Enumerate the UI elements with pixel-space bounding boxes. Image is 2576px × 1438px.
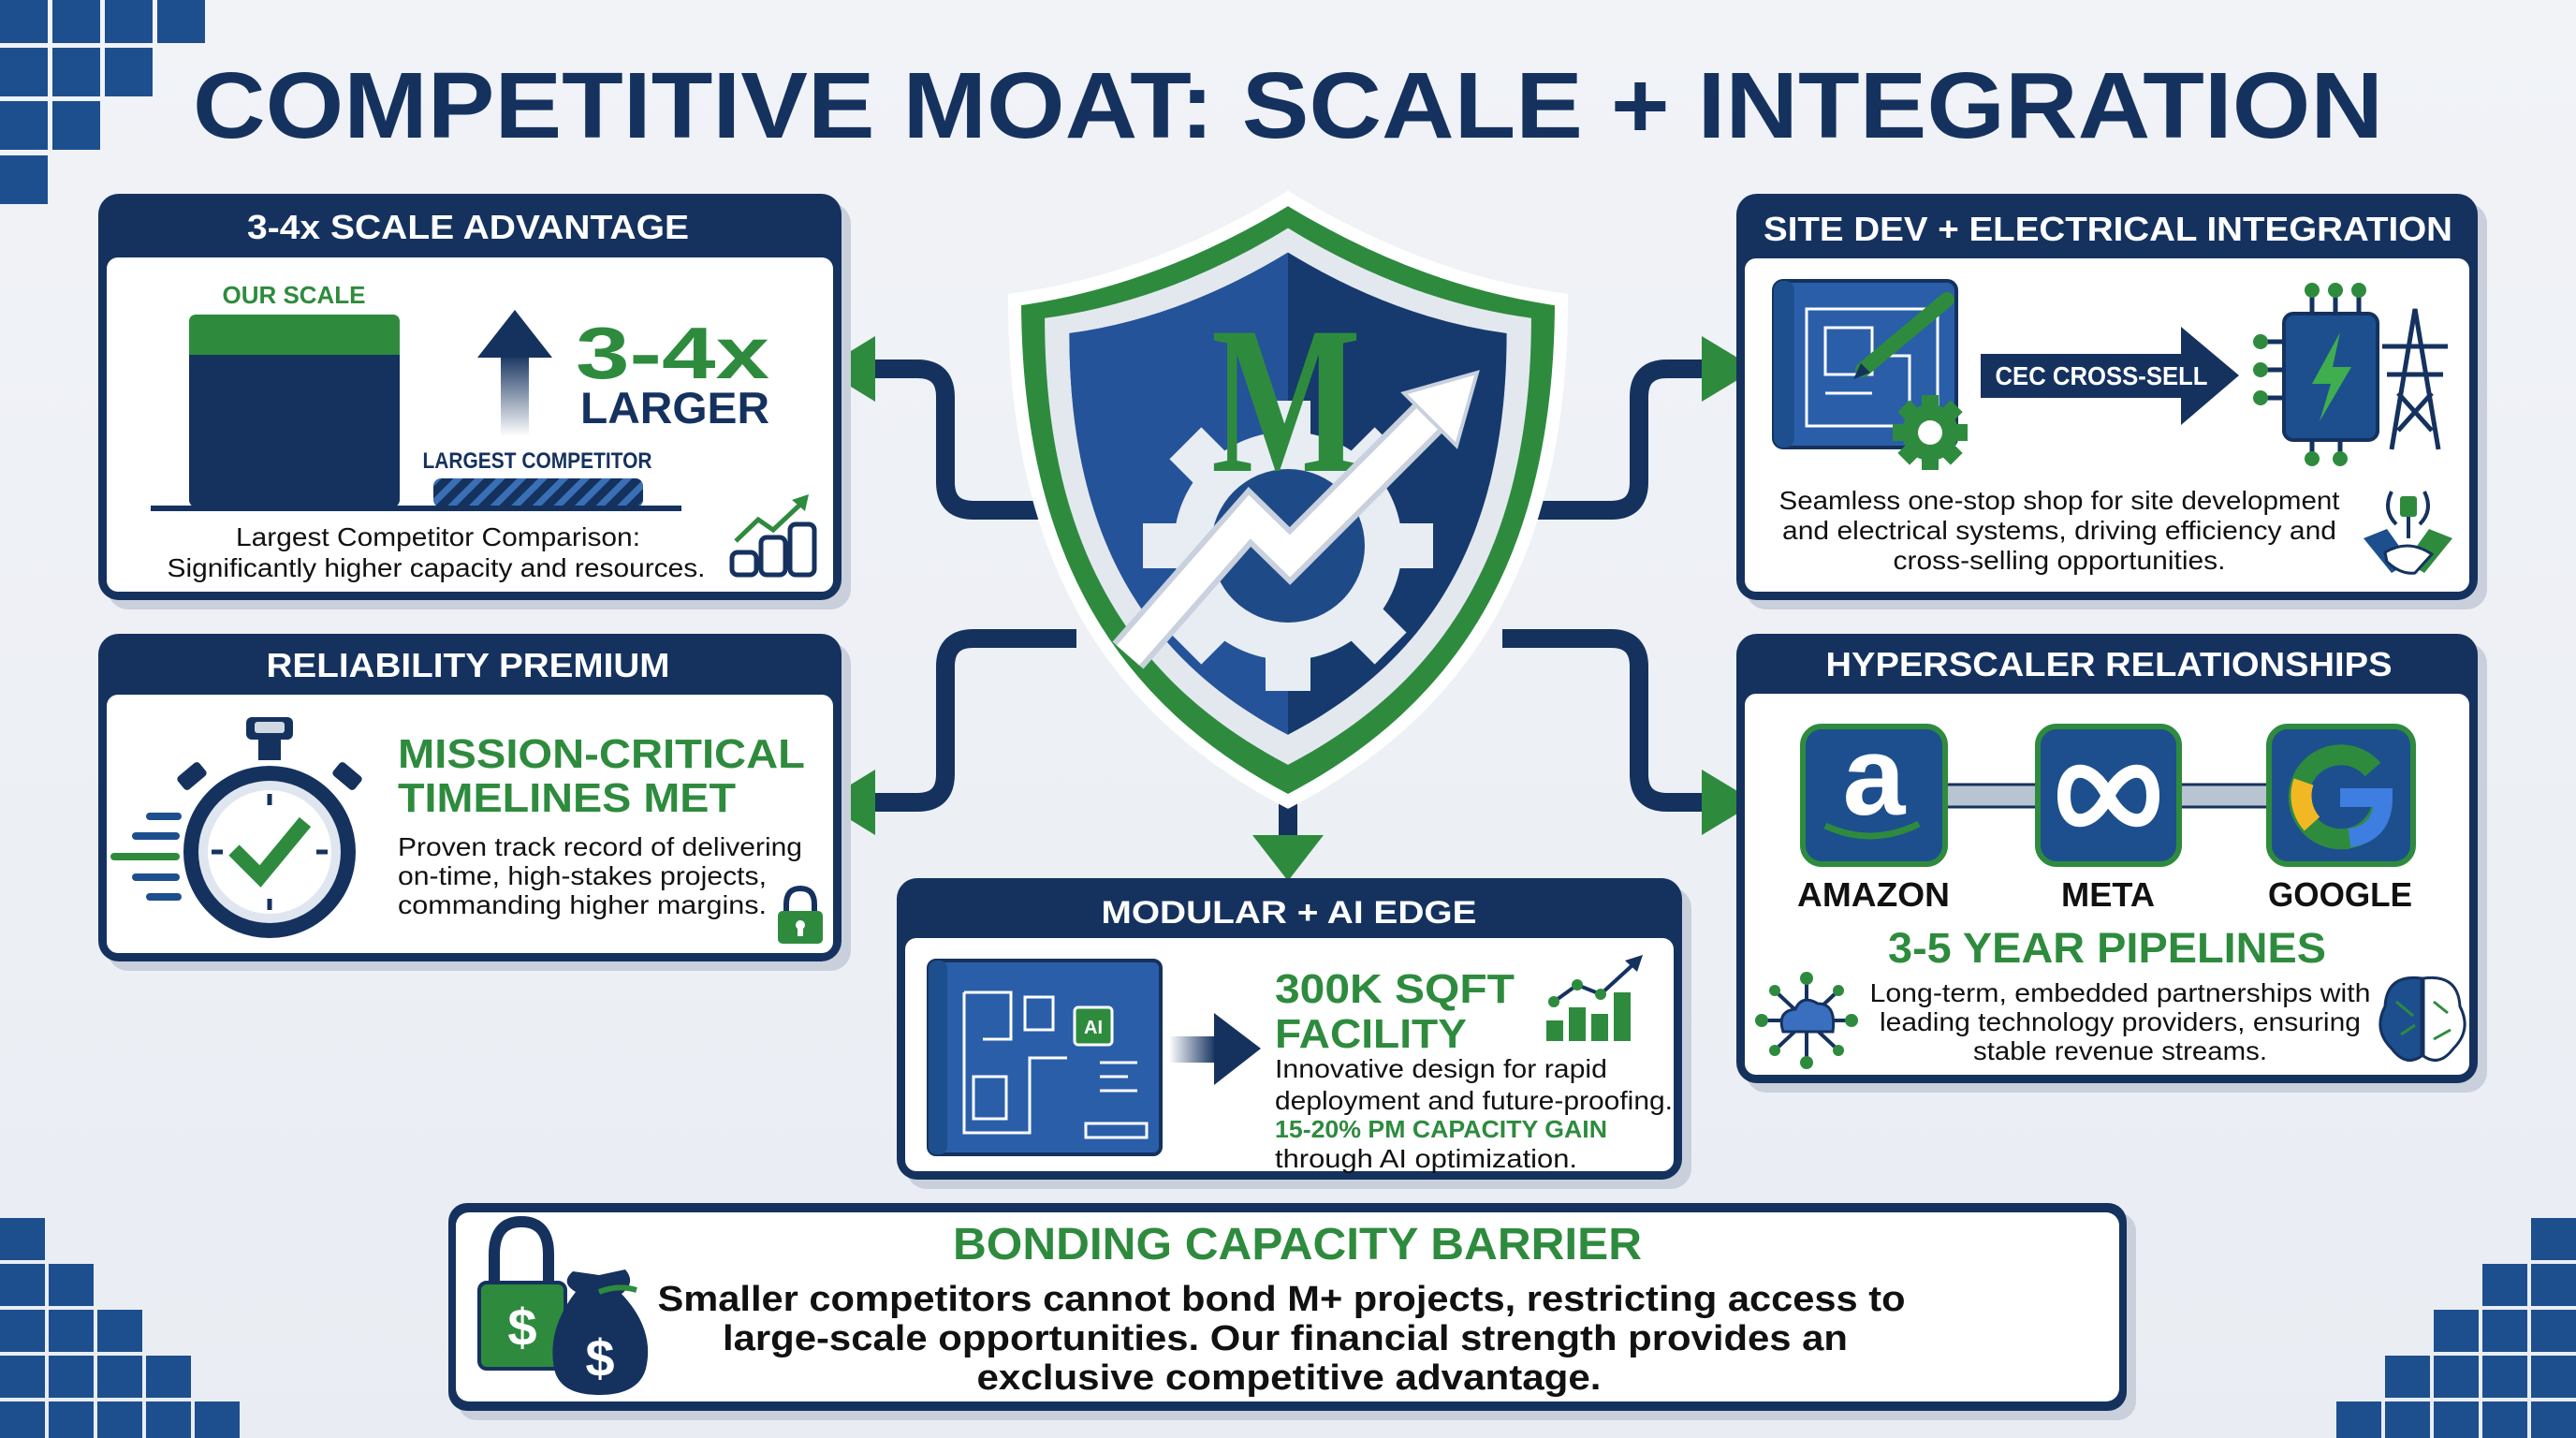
text block: reliability: on-time, high-stakes projects, — [398, 861, 767, 890]
stat: 3-4x larger — [576, 312, 769, 433]
heading: 300k sqft facility: 300K SQFT — [1275, 966, 1515, 1012]
connectors between logos — [1943, 785, 2271, 807]
heading: 300k sqft facility: FACILITY — [1275, 1011, 1467, 1057]
labels: hyperscalers: META — [2061, 875, 2155, 914]
panel: bonding capacity barrier — [448, 1203, 2136, 1420]
bar chart: scale comparison: OUR SCALE — [223, 281, 365, 309]
text block: comparison: Largest Competitor Comparison: — [236, 522, 640, 551]
text block: bonding — [657, 1280, 1906, 1398]
text block: site dev: cross-selling opportunities. — [1893, 546, 2226, 575]
text block: modular: through AI optimization. — [1275, 1144, 1577, 1173]
icon: coins growth — [732, 494, 814, 575]
text block: site dev: Seamless one-stop shop for site development — [1778, 486, 2340, 515]
icon: handshake with plug — [2364, 492, 2452, 573]
arrow: CEC cross-sell: CEC CROSS-SELL — [1996, 361, 2207, 390]
icon: growth chart — [1546, 955, 1643, 1041]
icon: cloud network — [1755, 972, 1858, 1069]
text block: modular — [1275, 1054, 1673, 1173]
icon: lock and money bag: $ — [585, 1328, 615, 1387]
text block: hyperscaler: stable revenue streams. — [1973, 1036, 2267, 1065]
shield emblem — [1008, 191, 1568, 809]
text block: modular: Innovative design for rapid — [1275, 1054, 1607, 1083]
panel: site dev + electrical integration — [1736, 194, 2487, 609]
heading: mission-critical — [398, 731, 805, 821]
icon: lock and money bag: $ — [507, 1298, 537, 1357]
icon: lock — [778, 888, 823, 944]
text block: reliability: commanding higher margins. — [398, 890, 767, 919]
labels: hyperscalers: AMAZON — [1797, 875, 1950, 914]
heading: site dev: SITE DEV + ELECTRICAL INTEGRATION — [1764, 210, 2452, 248]
text block: comparison — [167, 522, 706, 582]
labels: hyperscalers — [1797, 875, 2412, 914]
icon: meta logo — [2038, 726, 2179, 864]
arrow: modular — [1169, 1013, 1261, 1085]
arrow: CEC cross-sell — [1981, 327, 2239, 425]
labels: hyperscalers: GOOGLE — [2268, 875, 2412, 914]
heading: 300k sqft facility — [1275, 966, 1515, 1057]
stat: 3-4x larger: LARGER — [580, 383, 769, 433]
text block: hyperscaler: leading technology providers, ensuring — [1880, 1007, 2361, 1036]
panel: 3-4x scale advantage — [98, 194, 851, 609]
text block: hyperscaler: Long-term, embedded partnerships with — [1870, 978, 2370, 1007]
icon: amazon logo: a — [1843, 713, 1907, 839]
icon: lock and money bag — [479, 1222, 648, 1395]
icon: amazon logo — [1803, 713, 1945, 864]
heading: bonding: BONDING CAPACITY BARRIER — [953, 1220, 1642, 1269]
bar chart: scale comparison: LARGEST COMPETITOR — [423, 448, 651, 474]
text block: bonding: exclusive competitive advantage. — [977, 1358, 1601, 1398]
title: COMPETITIVE MOAT: SCALE + INTEGRATION — [193, 53, 2383, 158]
icon: google logo — [2269, 726, 2413, 864]
icon: blueprint with pencil and gear — [1774, 281, 1968, 470]
text block: reliability — [398, 832, 802, 919]
panel: hyperscaler relationships — [1736, 634, 2487, 1093]
heading: pipelines: 3-5 YEAR PIPELINES — [1888, 924, 2326, 972]
text block: site dev — [1778, 486, 2340, 575]
heading: reliability: RELIABILITY PREMIUM — [266, 646, 670, 684]
text block: site dev: and electrical systems, driving efficiency and — [1782, 516, 2336, 545]
stat: 3-4x larger: 3-4x — [576, 312, 769, 394]
icon: chip and power tower — [2253, 283, 2448, 466]
heading: scale: 3-4x SCALE ADVANTAGE — [247, 208, 689, 246]
heading: modular: MODULAR + AI EDGE — [1101, 895, 1477, 931]
text block: bonding: large-scale opportunities. Our financial strength provides an — [723, 1319, 1848, 1358]
text block: modular: deployment and future-proofing. — [1275, 1086, 1673, 1115]
text block: bonding: Smaller competitors cannot bond M+ projects, restricting access to — [657, 1280, 1906, 1319]
connector arrows — [822, 336, 1756, 881]
heading: hyperscaler: HYPERSCALER RELATIONSHIPS — [1825, 645, 2393, 683]
heading: mission-critical: TIMELINES MET — [398, 775, 736, 821]
shield emblem: M — [1211, 283, 1361, 517]
text block: comparison: Significantly higher capacity and resources. — [167, 553, 706, 582]
icon: brain — [2380, 977, 2465, 1060]
text block: hyperscaler — [1870, 978, 2370, 1065]
icon: stopwatch — [114, 717, 363, 938]
text block: reliability: Proven track record of delivering — [398, 832, 802, 861]
icon: AI blueprint: AI — [1084, 1018, 1103, 1038]
panel: modular + AI edge — [897, 878, 1691, 1189]
bar chart: scale comparison — [151, 281, 681, 511]
heading: mission-critical: MISSION-CRITICAL — [398, 731, 805, 777]
icon: AI blueprint — [929, 961, 1161, 1154]
panel: reliability premium — [98, 634, 851, 971]
text block: modular: 15-20% PM CAPACITY GAIN — [1275, 1115, 1607, 1143]
icon: up arrow — [477, 310, 552, 436]
